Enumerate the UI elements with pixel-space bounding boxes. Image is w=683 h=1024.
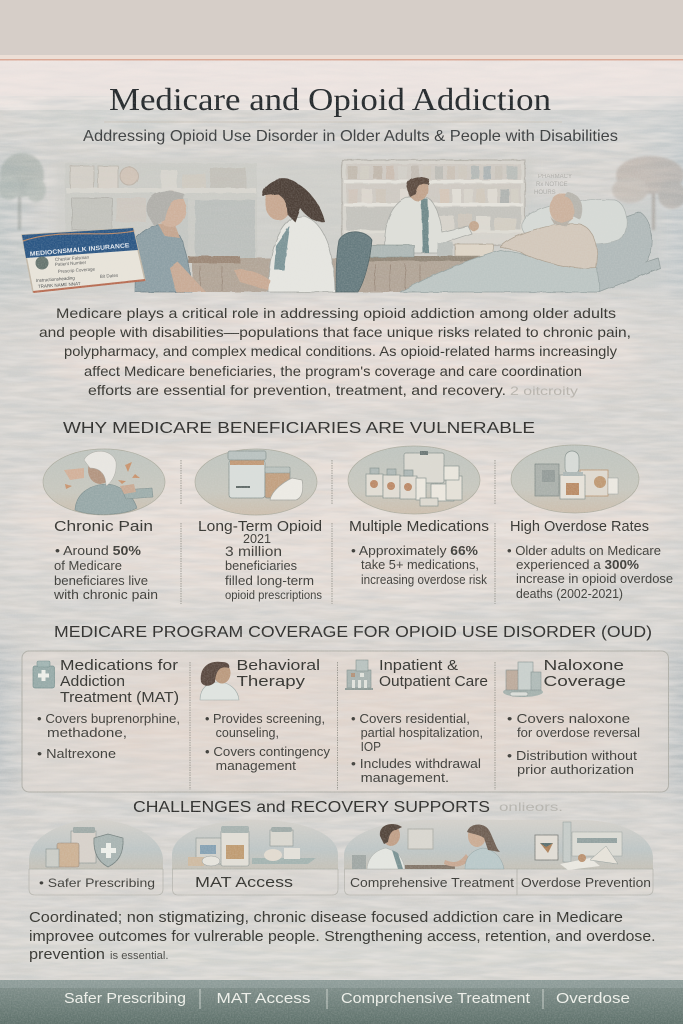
- card: long-term opioid: Long-Term Opioid: [198, 519, 322, 535]
- card: chronic pain: of Medicare: [54, 559, 122, 573]
- icon: MAT medications: [188, 826, 316, 866]
- column: naloxone coverage: prior authorization: [517, 763, 634, 777]
- card: high overdose rates: [507, 519, 673, 601]
- card: chronic pain: beneficiares live: [54, 574, 148, 588]
- card: overdose prevention: Overdose Prevention: [521, 875, 651, 890]
- intro paragraph: efforts are essential for prevention, treatment, and recovery.: [88, 382, 506, 398]
- insurance card: Bit Dates: [100, 273, 119, 279]
- pharmacist: [385, 177, 479, 253]
- card: comprehensive treatment: Comprehensive Treatment: [350, 875, 514, 890]
- card: long-term opioid: 3 million: [225, 544, 282, 559]
- column: inpatient and outpatient care: • Covers residential,: [351, 712, 470, 726]
- card: multiple medications: Multiple Medications: [349, 519, 489, 535]
- column: naloxone coverage: Naloxone: [544, 658, 624, 674]
- icon: medical bag: [33, 661, 54, 688]
- card: long-term opioid: [198, 519, 322, 602]
- icon: jars and shield: [46, 827, 123, 867]
- column: behavioral therapy: • Provides screening,: [205, 712, 325, 726]
- insurance card: Patient Number: [55, 260, 87, 267]
- bottles middle row: [348, 189, 519, 203]
- card: chronic pain: • Around 50%: [55, 544, 141, 558]
- heading: challenges and recovery supports: onlieors.: [499, 800, 563, 814]
- faded wall notice: HOURS: [534, 190, 556, 196]
- column: inpatient and outpatient care: IOP: [361, 740, 381, 754]
- icon: naloxone kit: [503, 662, 543, 697]
- column: inpatient and outpatient care: • Includes withdrawal: [351, 757, 481, 771]
- boxes bottom row: [438, 214, 516, 230]
- insurance card: Chestor Falsman: [55, 255, 90, 262]
- panel: program coverage: [22, 651, 668, 792]
- icon: hospital: [345, 660, 373, 690]
- insurance card: Prescrip Coverage: [58, 266, 96, 274]
- column: behavioral therapy: [200, 658, 331, 773]
- closing statement: prevention: [29, 946, 105, 963]
- card: MAT access: [172, 820, 338, 895]
- column: naloxone coverage: Coverage: [544, 674, 626, 690]
- faded wall notice: Rx NOTICE: [536, 182, 568, 188]
- hero backdrop wash: [55, 158, 660, 290]
- card: multiple medications: • Approximately 66%: [351, 544, 478, 558]
- closing statement: Coordinated; non stigmatizing, chronic disease focused addiction care in Medicare: [29, 909, 623, 926]
- footer band: MAT Access: [216, 991, 310, 1007]
- card: overdose prevention: [517, 820, 653, 895]
- icon: long-term opioid jars: [195, 449, 317, 515]
- card: long-term opioid: filled long-term: [225, 574, 314, 588]
- panel: recovery support cards: [29, 820, 653, 895]
- bottles top row: [348, 166, 517, 179]
- column: medications for addiction treatment: • Naltrexone: [37, 747, 116, 761]
- pharmacy shelves: [342, 160, 525, 245]
- card: safer prescribing: [29, 820, 163, 895]
- bed and patient: [400, 192, 660, 292]
- card: chronic pain: Chronic Pain: [54, 519, 153, 535]
- faded wall notice: PHARMACY: [538, 174, 572, 180]
- card: chronic pain: with chronic pain: [53, 588, 158, 602]
- icon: chronic pain: [43, 449, 165, 515]
- card: high overdose rates: • Older adults on Medicare: [507, 544, 661, 558]
- card: high overdose rates: deaths (2002-2021): [516, 587, 623, 601]
- doctor: [234, 179, 335, 292]
- card: chronic pain: [53, 519, 158, 602]
- intro paragraph: Medicare plays a critical role in addressing opioid addiction among older adults: [56, 305, 616, 321]
- icon: overdose rates: [511, 445, 639, 513]
- icon: therapist: [200, 662, 239, 700]
- column: naloxone coverage: for overdose reversal: [517, 726, 640, 740]
- hero illustration: Medicare care scene: [0, 153, 683, 293]
- column: behavioral therapy: Behavioral: [236, 658, 320, 674]
- column: medications for addiction treatment: Medications for: [60, 658, 178, 674]
- right tree: [612, 156, 683, 230]
- intro paragraph: polypharmacy, and complex medical conditions. As opioid-related harms increasingly: [64, 343, 617, 359]
- column: medications for addiction treatment: • Covers buprenorphine,: [37, 712, 180, 726]
- title: Medicare and Opioid Addiction: [109, 81, 551, 117]
- card: multiple medications: increasing overdose risk: [361, 573, 488, 587]
- insurance card: TRARK NAME NNAT: [38, 281, 81, 289]
- title rule: [104, 121, 562, 123]
- column: behavioral therapy: management: [216, 759, 297, 773]
- closing statement: improvee outcomes for vulrerable people. Strengthening access, retention, and overdose.: [29, 928, 656, 945]
- intro paragraph: [39, 305, 631, 398]
- card: high overdose rates: experienced a 300%: [516, 558, 639, 572]
- column: inpatient and outpatient care: Inpatient &: [379, 658, 458, 674]
- closing statement: [29, 909, 656, 963]
- footer band: Comprchensive Treatment: [341, 991, 530, 1007]
- column: inpatient and outpatient care: [345, 658, 488, 785]
- heading: program coverage: MEDICARE PROGRAM COVERAGE FOR OPIOID USE DISORDER (OUD): [54, 624, 652, 641]
- column: medications for addiction treatment: methadone,: [47, 726, 127, 740]
- card: multiple medications: take 5+ medications,: [361, 558, 479, 572]
- footer band: Overdose: [556, 991, 630, 1007]
- column: medications for addiction treatment: [33, 658, 180, 761]
- card: high overdose rates: High Overdose Rates: [510, 519, 649, 535]
- insurance card: MEDIOCNSMALK INSURANCE: [30, 242, 130, 258]
- insurance card: Instructionsheading: [36, 275, 75, 283]
- column dividers: [181, 460, 495, 604]
- top blank band: [0, 0, 683, 60]
- back wall shelves: [65, 163, 257, 260]
- insurance card: [22, 228, 146, 293]
- heading: challenges and recovery supports: CHALLENGES and RECOVERY SUPPORTS: [133, 799, 490, 816]
- faded wall notice: [534, 174, 572, 196]
- card: MAT access: MAT Access: [195, 875, 293, 891]
- column: medications for addiction treatment: Treatment (MAT): [60, 690, 179, 706]
- counter and wood desk: [188, 242, 493, 292]
- icon: clinician and patient: [352, 824, 504, 869]
- footer band: [0, 980, 683, 1024]
- card: comprehensive treatment: [344, 820, 517, 895]
- intro paragraph: affect Medicare beneficiaries, the program's coverage and care coordination: [84, 363, 582, 379]
- column: inpatient and outpatient care: Outpatient Care: [379, 674, 488, 690]
- card: long-term opioid: beneficiaries: [225, 559, 297, 573]
- card: multiple medications: [349, 519, 489, 587]
- heading: why vulnerable: WHY MEDICARE BENEFICIARIES ARE VULNERABLE: [63, 420, 535, 437]
- left tree: [0, 153, 46, 230]
- column: behavioral therapy: • Covers contingency: [205, 745, 331, 759]
- column: naloxone coverage: • Distribution without: [507, 749, 638, 763]
- panel: why Medicare beneficiaries are vulnerable: [43, 445, 673, 604]
- intro paragraph: 2 oitcroity: [510, 384, 578, 398]
- intro paragraph: and people with disabilities—populations that face unique risks related to chronic pain,: [39, 324, 631, 340]
- icon: overdose kit: [535, 822, 622, 870]
- card: safer prescribing: • Safer Prescribing: [39, 876, 155, 890]
- column: naloxone coverage: • Covers naloxone: [507, 712, 630, 726]
- column: medications for addiction treatment: Addiction: [60, 674, 125, 690]
- column dividers: [190, 662, 495, 790]
- column: behavioral therapy: counseling,: [216, 726, 279, 740]
- chair: [336, 232, 372, 292]
- column: inpatient and outpatient care: management.: [361, 771, 449, 785]
- closing statement: is essential.: [110, 950, 168, 962]
- patient with doctor: [135, 191, 206, 292]
- column: naloxone coverage: [503, 658, 640, 777]
- column: inpatient and outpatient care: partial hospitalization,: [361, 726, 483, 740]
- column: behavioral therapy: Therapy: [236, 674, 306, 690]
- card: long-term opioid: opioid prescriptions: [225, 590, 322, 602]
- icon: multiple medications: [348, 446, 480, 514]
- subtitle: Addressing Opioid Use Disorder in Older Adults & People with Disabilities: [83, 128, 618, 145]
- card: long-term opioid: 2021: [243, 532, 271, 546]
- footer band: Safer Prescribing: [64, 991, 186, 1007]
- card: high overdose rates: increase in opioid overdose: [516, 572, 673, 586]
